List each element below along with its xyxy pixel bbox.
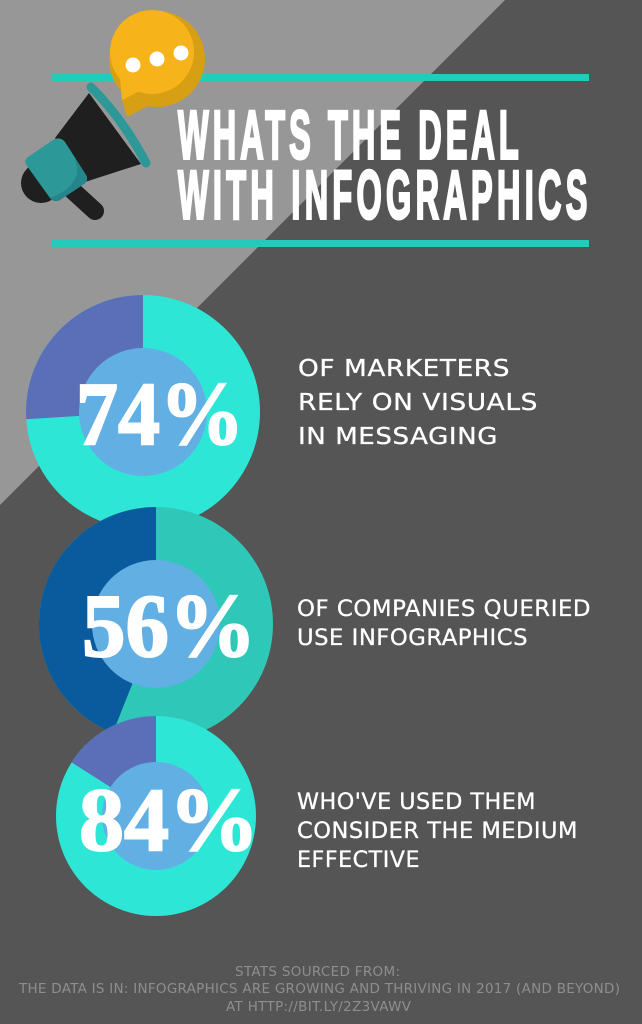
source credit: STATS SOURCED FROM:: [235, 964, 400, 980]
donut chart: 74%: [26, 295, 260, 529]
title: WHATS THE DEAL: [178, 97, 519, 174]
source credit: AT HTTP://BIT.LY/2Z3VAWV: [226, 999, 412, 1015]
icon: megaphone: [21, 87, 146, 211]
source credit: THE DATA IS IN: INFOGRAPHICS ARE GROWING AND THRIVING IN 2017 (AND BEYOND): [18, 981, 620, 997]
donut chart: 84%: 84%: [79, 771, 259, 870]
donut chart: 74%: 74%: [76, 365, 244, 464]
text block: medium effective: WHO'VE USED THEM: [297, 790, 536, 815]
donut chart: 84%: [56, 716, 259, 916]
top teal rule: [52, 74, 589, 81]
text block: medium effective: CONSIDER THE MEDIUM: [297, 819, 578, 844]
text block: medium effective: EFFECTIVE: [297, 848, 420, 873]
text block: marketers: IN MESSAGING: [298, 424, 498, 450]
text block: medium effective: [297, 790, 578, 873]
text block: companies: USE INFOGRAPHICS: [297, 626, 528, 651]
title: [178, 97, 587, 234]
text block: companies: [297, 597, 591, 651]
text block: marketers: [298, 356, 538, 450]
text block: marketers: OF MARKETERS: [298, 356, 510, 382]
bottom teal rule: [51, 240, 589, 247]
donut chart: 56%: [39, 507, 273, 741]
title: WITH INFOGRAPHICS: [178, 157, 587, 234]
text block: marketers: RELY ON VISUALS: [298, 390, 538, 416]
donut chart: 56%: 56%: [82, 577, 256, 676]
source credit: [18, 964, 620, 1015]
icon: speech bubble: [109, 10, 205, 117]
text block: companies: OF COMPANIES QUERIED: [297, 597, 591, 622]
